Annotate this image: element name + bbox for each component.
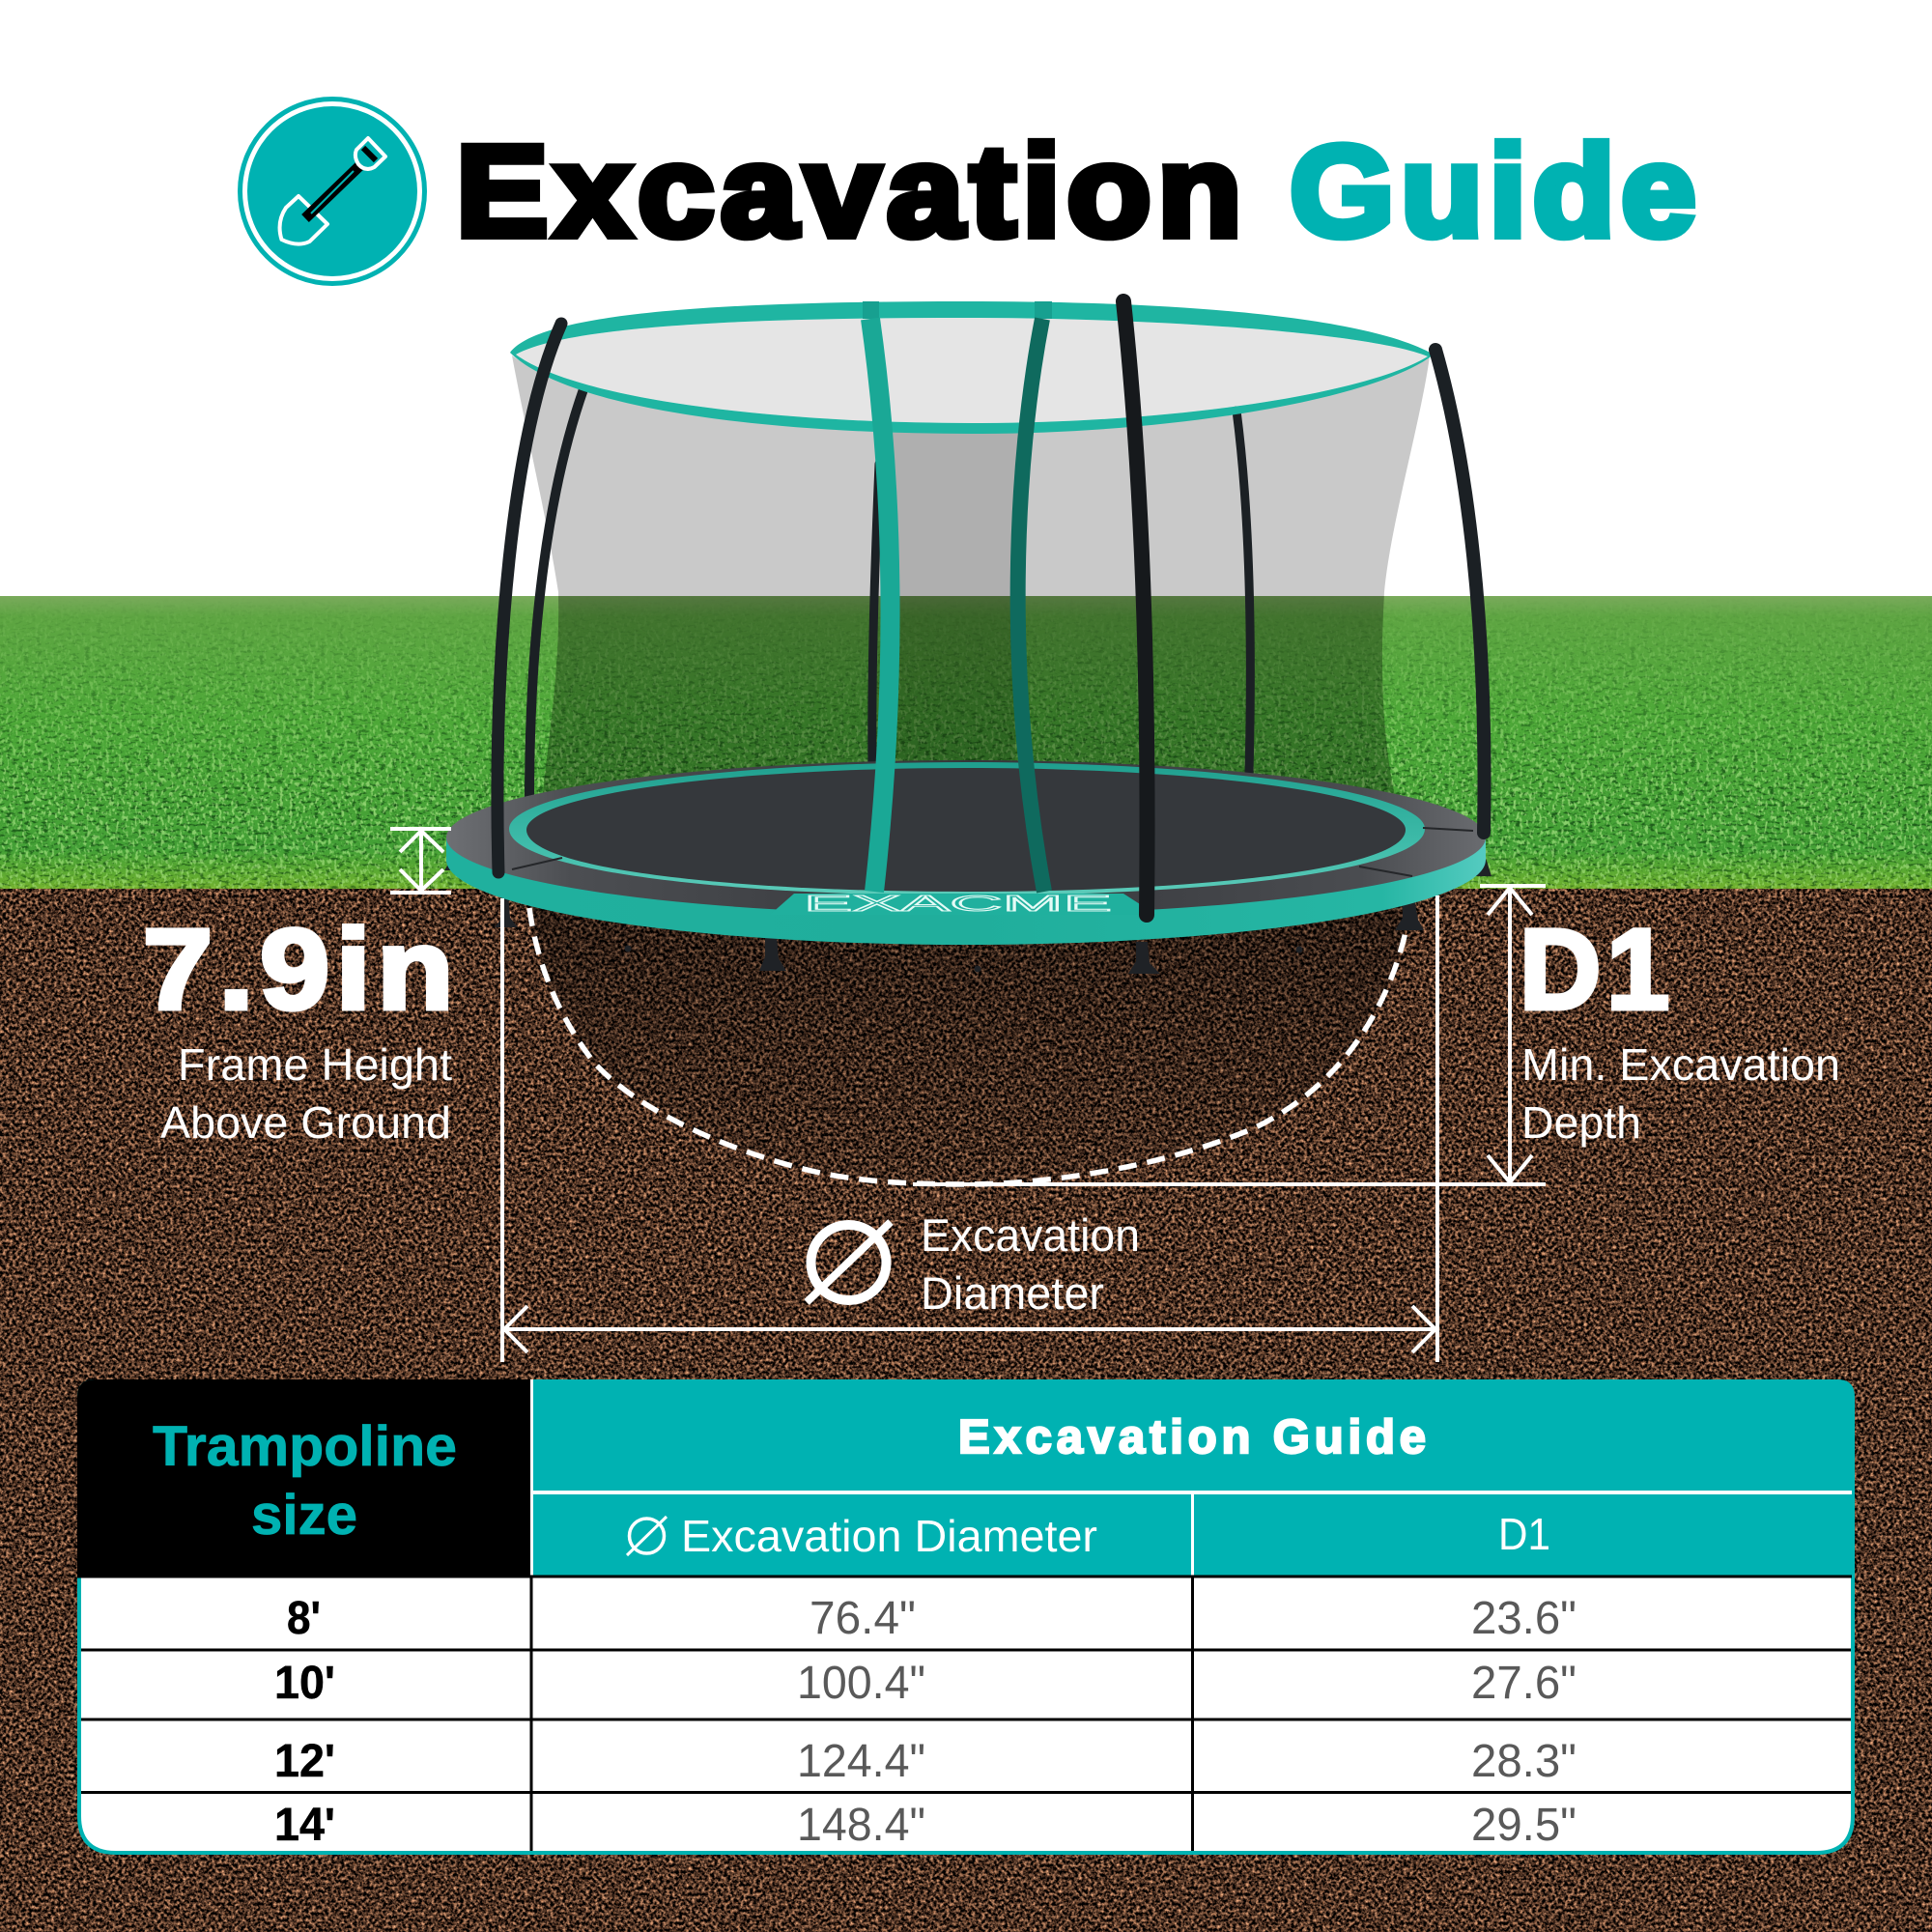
logo panel: EXACME: [804, 891, 1112, 916]
trampoline frame and mat: [446, 760, 1486, 945]
jump mat: [526, 768, 1406, 892]
label: excavation diameter: [921, 1209, 1140, 1319]
table column: D1: D1: [1498, 1509, 1550, 1559]
icon: diameter symbol: [807, 1222, 891, 1302]
label: 7.9in frame height: [143, 906, 460, 1148]
net poles behind the mat: [529, 389, 1250, 802]
table header: trampoline size: [153, 1415, 457, 1547]
label: excavation diameter: Diameter: [921, 1267, 1104, 1319]
table sizes: 12': [274, 1736, 335, 1787]
table header: excavation guide: Excavation Guide: [958, 1411, 1426, 1463]
label: 7.9in frame height: Above Ground: [160, 1097, 451, 1148]
table excavation diameters: 124.4": [797, 1736, 925, 1787]
table excavation diameters: 100.4": [797, 1658, 925, 1709]
excavated bowl shadow: [529, 898, 1406, 1184]
table header: trampoline size: size: [251, 1484, 357, 1547]
table sizes: 8': [287, 1593, 321, 1644]
table sizes: [274, 1593, 335, 1851]
teal inner ring: [509, 762, 1425, 895]
safety net enclosure: [512, 318, 1430, 811]
table D1 depths: [1471, 1593, 1577, 1851]
table excavation diameters: 148.4": [797, 1800, 925, 1851]
label: D1 minimum excavation depth: [1520, 906, 1840, 1148]
background: white sky: [0, 0, 1932, 599]
table excavation diameters: [797, 1593, 925, 1851]
label: 7.9in frame height: 7.9in: [143, 906, 460, 1034]
frame height dimension: [390, 829, 451, 893]
label: D1 minimum excavation depth: Depth: [1521, 1097, 1641, 1148]
label: excavation diameter: Excavation: [921, 1209, 1140, 1261]
title: Excavation: [456, 120, 1248, 264]
soil ground: [0, 893, 1932, 1932]
logo panel: [770, 891, 1156, 916]
title: [456, 120, 1702, 264]
title icon: shovel badge: [240, 99, 425, 284]
table header: trampoline size: Trampoline: [153, 1415, 457, 1478]
table D1 depths: 23.6": [1471, 1593, 1577, 1644]
table sizes: 14': [274, 1800, 335, 1851]
table D1 depths: 28.3": [1471, 1736, 1577, 1787]
front straps and poles: [497, 301, 1485, 915]
table D1 depths: 29.5": [1471, 1800, 1577, 1851]
grass field: [0, 596, 1932, 895]
trampoline legs: [444, 858, 1492, 974]
label: D1 minimum excavation depth: D1: [1520, 906, 1675, 1034]
excavation diameter dimension: [502, 895, 1437, 1362]
table sizes: 10': [274, 1658, 335, 1709]
table D1 depths: 27.6": [1471, 1658, 1577, 1709]
excavation bowl dashed outline: [529, 908, 1406, 1184]
title: Guide: [1290, 120, 1702, 264]
table: [77, 1379, 1855, 1855]
grey pad: [446, 760, 1486, 915]
label: 7.9in frame height: Frame Height: [178, 1039, 452, 1090]
label: D1 minimum excavation depth: Min. Excavation: [1521, 1039, 1840, 1090]
teal skirt: [446, 838, 1486, 945]
top ring of the net: [510, 301, 1434, 434]
D1 depth dimension: [913, 886, 1546, 1184]
table column: excavation diameter: Excavation Diameter: [681, 1511, 1097, 1561]
table excavation diameters: 76.4": [810, 1593, 916, 1644]
